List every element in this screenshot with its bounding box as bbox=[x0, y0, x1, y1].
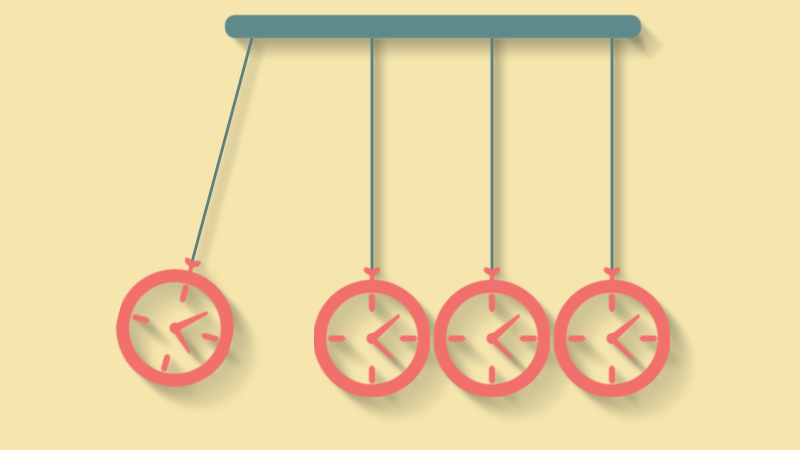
hanging bar bbox=[225, 15, 641, 38]
swinging pendulum clock bbox=[111, 38, 271, 419]
clock 1 face bbox=[111, 246, 244, 392]
clock 4 face bbox=[560, 267, 664, 391]
pendulum clock 2 bbox=[320, 38, 451, 418]
shadow: string 4 bbox=[613, 38, 628, 278]
shadow: string 2 bbox=[373, 38, 388, 278]
pendulum clock 3 bbox=[440, 38, 571, 418]
clock 3 shadow bbox=[443, 270, 571, 418]
shadow: bar underside bbox=[232, 36, 650, 60]
shadow: string 1 bbox=[194, 38, 265, 270]
clock 3 face bbox=[440, 267, 544, 391]
shadow of bar and strings bbox=[194, 18, 664, 278]
string 4 bbox=[611, 38, 613, 270]
string 1 bbox=[192, 38, 252, 262]
clock 4 shadow bbox=[563, 270, 691, 418]
string 2 bbox=[371, 38, 373, 270]
pendulum clock 4 bbox=[560, 38, 691, 418]
shadow: bar right end bbox=[628, 18, 664, 60]
string 3 bbox=[491, 38, 493, 270]
clock 2 face bbox=[320, 267, 424, 391]
clock 2 shadow bbox=[323, 270, 451, 418]
clock 1 shadow bbox=[114, 249, 271, 419]
shadow: string 3 bbox=[493, 38, 508, 278]
